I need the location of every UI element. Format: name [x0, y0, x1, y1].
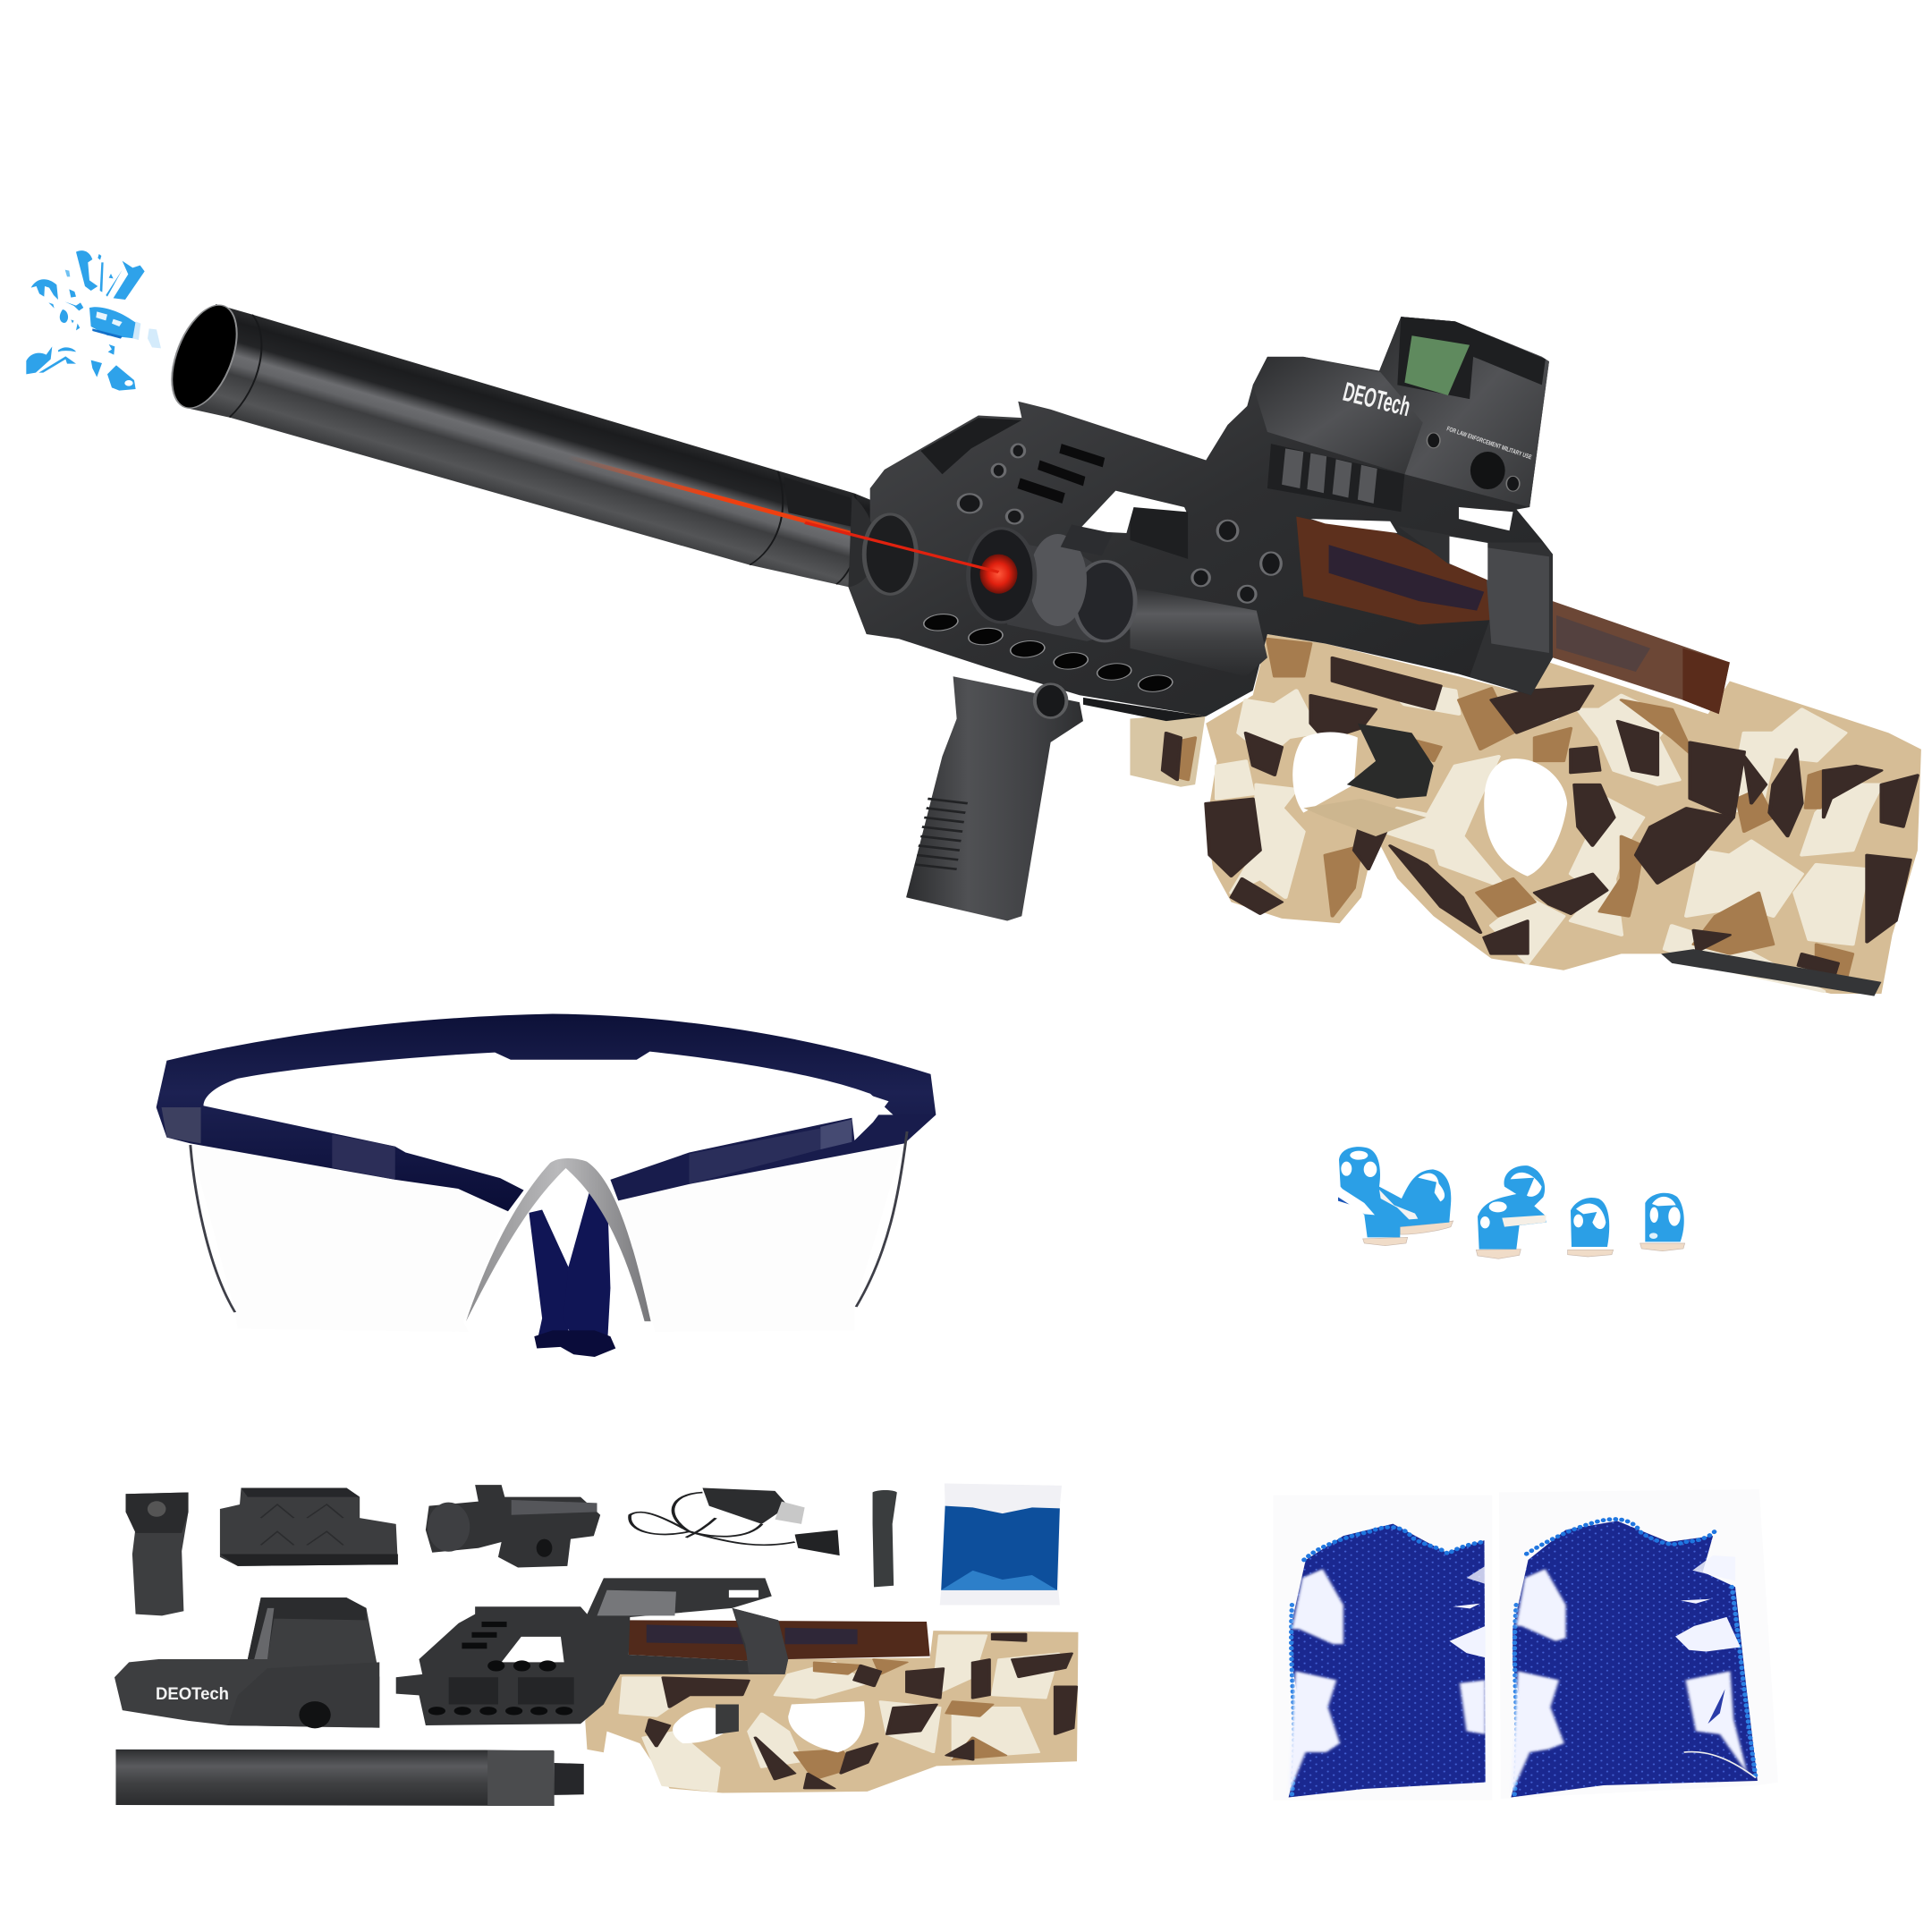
optic small print: FOR LAW ENFORCEMENT MILITARY USE	[1445, 426, 1532, 462]
nose piece	[466, 1158, 651, 1321]
right lower band	[610, 1114, 936, 1200]
trigger	[1347, 724, 1434, 799]
main blaster suppressor barrel	[160, 301, 877, 588]
target 2	[1478, 1165, 1546, 1250]
optic window	[1404, 335, 1470, 395]
practice targets	[1338, 1147, 1685, 1258]
target 3	[1571, 1198, 1609, 1247]
red dot optic	[1253, 317, 1549, 507]
rear arch facet	[1484, 547, 1549, 653]
lens edges	[191, 1131, 907, 1312]
accessory kit flat lay	[114, 1483, 1079, 1806]
bag outlines	[1273, 1489, 1778, 1801]
main blaster gun	[805, 317, 1921, 996]
barrel mount	[848, 496, 916, 594]
icon: laser sight	[805, 522, 1267, 676]
magazine	[1553, 601, 1730, 714]
handguard vent holes	[921, 612, 1175, 694]
rear arch	[1397, 526, 1553, 695]
frame hinge	[162, 1095, 889, 1184]
suppressor	[115, 1750, 584, 1806]
optic logo: DEOTech	[1340, 377, 1413, 422]
target 1	[1338, 1147, 1451, 1237]
side rail	[1267, 444, 1404, 512]
bag 2 beads	[1511, 1519, 1758, 1797]
magazine window	[1296, 517, 1491, 624]
lenses	[191, 1131, 907, 1332]
front grip	[906, 676, 1083, 921]
bottom rail	[1661, 949, 1881, 996]
safety glasses	[157, 1013, 936, 1357]
target 4	[1645, 1193, 1684, 1241]
receiver body	[848, 317, 1553, 716]
trigger guard opening	[1292, 733, 1358, 813]
foregrip	[126, 1493, 189, 1615]
USB charging cable	[630, 1488, 840, 1555]
bag 1 beads	[1289, 1524, 1486, 1797]
camouflage stock	[1130, 634, 1921, 994]
top ribs	[920, 418, 1021, 474]
disassembled blaster receiver	[396, 1578, 930, 1725]
lower rail teeth	[1083, 698, 1206, 721]
blaster openings	[673, 1707, 733, 1743]
thumbhole opening	[1484, 758, 1567, 877]
laser attachment	[426, 1485, 600, 1568]
bag of gel balls	[940, 1483, 1062, 1606]
kit optic logo: DEOTech	[156, 1685, 229, 1704]
rail slots	[1017, 444, 1105, 504]
muzzle adapter	[873, 1490, 897, 1587]
bags of gel balls	[1273, 1489, 1778, 1801]
ear straps	[529, 1191, 615, 1357]
optic sight	[114, 1597, 379, 1728]
top band	[157, 1013, 936, 1211]
openings	[1078, 491, 1513, 580]
icon: gel ball splash	[26, 250, 161, 391]
rail block	[220, 1488, 398, 1566]
bolts	[958, 445, 1281, 715]
target bases	[1363, 1221, 1685, 1258]
disassembled blaster stock	[585, 1631, 1079, 1793]
